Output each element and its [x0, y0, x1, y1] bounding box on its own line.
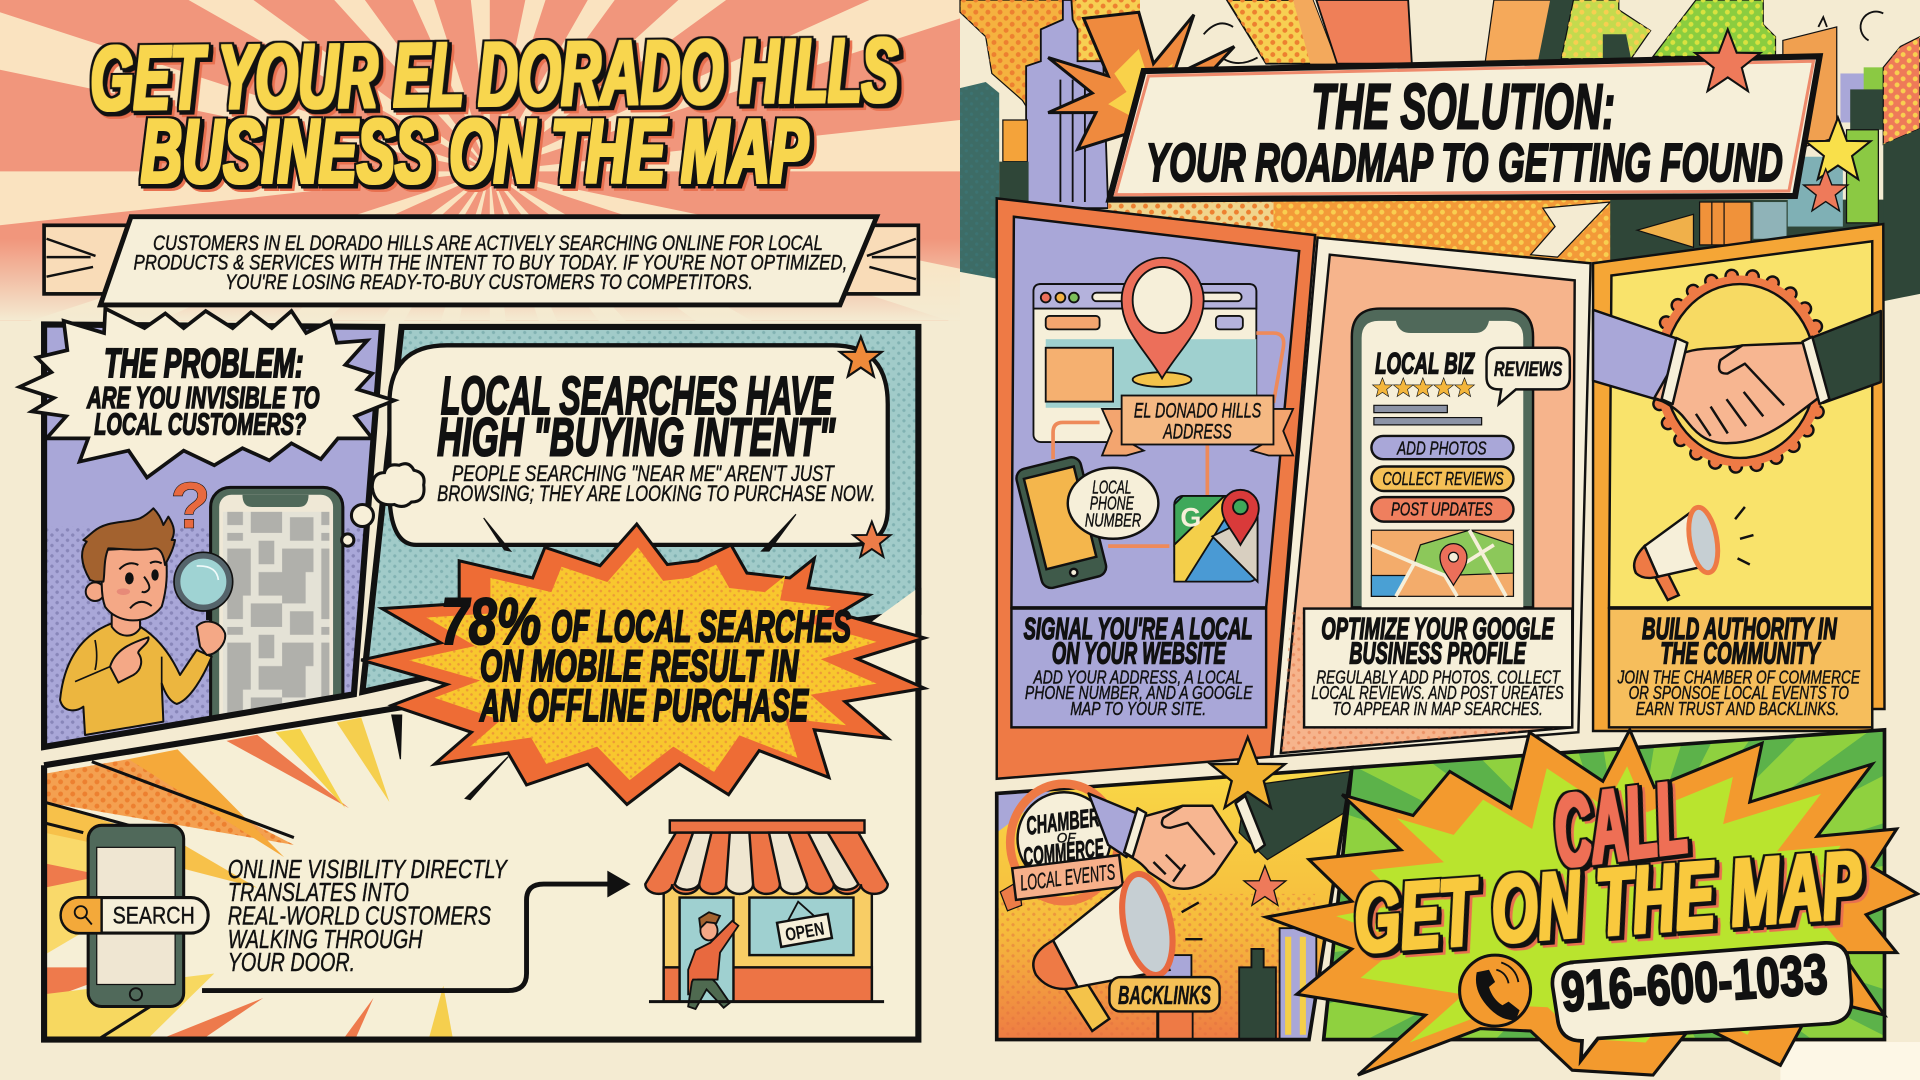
browser window	[1033, 284, 1284, 546]
icon: handshake small	[1089, 793, 1265, 889]
title: GET YOUR EL DORADO HILLS	[90, 20, 899, 129]
phone number bubble	[1552, 942, 1851, 1060]
open sign: OPEN	[784, 917, 826, 945]
icon: mobile phone	[1014, 455, 1108, 590]
caption: website: ON YOUR WEBSITE	[1052, 637, 1227, 671]
jagged bubble: the problem: LOCAL CUSTOMERS?	[94, 408, 306, 442]
open sign	[774, 897, 832, 947]
chamber badge: COMMERCE	[1022, 834, 1106, 872]
search bar: SEARCH	[113, 902, 195, 929]
caption: website	[1011, 609, 1266, 727]
bubble heading: HIGH "BUYING INTENT"	[437, 408, 836, 468]
address ribbon: EL DONADO HILLS	[1134, 400, 1261, 423]
body text: online visibility	[228, 856, 508, 977]
jagged bubble: the problem: ARE YOU INVISIBLE TO	[86, 381, 320, 415]
call text: CALL	[1548, 759, 1693, 890]
icon: gold star	[1211, 737, 1285, 808]
caption: google profile: REGULABLY ADD PHOTOS. COLLECT	[1316, 666, 1561, 687]
banner strip behind	[44, 225, 918, 294]
pill: collect reviews	[1371, 467, 1513, 491]
heading text	[1146, 72, 1783, 193]
magnifier	[206, 611, 210, 620]
burst text: OF LOCAL SEARCHES	[551, 603, 851, 652]
panel: community authority step	[1593, 224, 1884, 731]
phone number bubble: NUMBER	[1085, 510, 1141, 531]
teal tower	[960, 82, 999, 279]
awning	[645, 820, 888, 894]
orange stripe	[1485, 0, 1555, 61]
bubble text	[437, 461, 876, 506]
chamber badge: OF	[1057, 830, 1076, 845]
speech bubble: buying intent	[342, 337, 888, 546]
burst text: ON MOBILE RESULT IN	[480, 642, 799, 691]
icon: google map	[1174, 490, 1259, 582]
starburst	[1266, 730, 1918, 1075]
body text: online visibility: YOUR DOOR.	[228, 949, 355, 977]
body text: online visibility: WALKING THROUGH	[228, 926, 423, 954]
person in doorway	[688, 912, 738, 1009]
lavender tower	[1026, 0, 1108, 208]
body text: online visibility: ONLINE VISIBILITY DIRECTLY	[228, 856, 508, 884]
caption: google profile: OPTIMIZE YOUR GOOGLE	[1321, 612, 1555, 646]
man with magnifying glass	[60, 508, 233, 735]
icon: phone with search bar	[61, 825, 208, 1007]
face	[102, 547, 167, 620]
city buildings	[1157, 928, 1316, 1040]
mid band	[1273, 200, 1616, 263]
pill: add photos: ADD PHOTOS	[1396, 437, 1487, 458]
title	[90, 20, 899, 202]
icon: megaphone	[1634, 505, 1753, 600]
jagged bubble: the problem	[20, 309, 394, 478]
jagged bubble: the problem: THE PROBLEM:	[104, 340, 304, 386]
icon: five stars	[1373, 378, 1474, 396]
icon: handshake	[1593, 310, 1881, 443]
eyes and mouth	[126, 573, 133, 583]
listing name: LOCAL BIZ	[1375, 347, 1475, 380]
question mark: ?	[170, 469, 211, 543]
panel: website step	[997, 198, 1315, 779]
phone	[1352, 309, 1570, 607]
address ribbon: ADDRESS	[1162, 420, 1232, 443]
phone with blurred screen	[211, 487, 343, 744]
intro text: CUSTOMERS IN EL DORADO HILLS ARE ACTIVELY SEARCHING ONLINE FOR LOCAL	[153, 232, 823, 255]
icon: storefront	[645, 820, 888, 1009]
panel: problem	[44, 324, 382, 747]
phone number bubble: LOCAL	[1092, 476, 1131, 497]
body text: online visibility: TRANSLATES INTO	[228, 879, 409, 907]
panel: teal buying intent background	[362, 327, 918, 694]
skyline background right	[960, 0, 1920, 301]
heading text: THE SOLUTION:	[1311, 72, 1615, 143]
comic curves	[1204, 23, 1258, 63]
address ribbon	[1102, 396, 1293, 456]
hand holding magnifier	[197, 622, 225, 655]
caption: website: ADD YOUR ADDRESS, A LOCAL	[1033, 666, 1243, 687]
bubble heading: LOCAL SEARCHES HAVE	[441, 366, 834, 426]
bubble text: BROWSING; THEY ARE LOOKING TO PURCHASE NOW.	[437, 481, 876, 506]
phone number bubble: PHONE	[1090, 492, 1134, 513]
caption: website: SIGNAL YOU'RE A LOCAL	[1024, 612, 1253, 646]
seal badge	[1654, 276, 1826, 467]
caption: community	[1609, 609, 1872, 727]
sunburst header background	[0, 0, 960, 321]
phone number bubble	[1068, 468, 1158, 539]
intro text: PRODUCTS & SERVICES WITH THE INTENT TO BUY TODAY. IF YOU'RE NOT OPTIMIZED,	[133, 251, 847, 274]
burst text	[441, 585, 851, 731]
yellow green block	[1561, 0, 1651, 59]
neck	[112, 612, 140, 636]
sweater	[60, 623, 212, 735]
rays	[44, 718, 453, 1040]
pill: post updates	[1371, 497, 1513, 522]
backlinks pill: BACKLINKS	[1118, 982, 1211, 1010]
icon: google map: G	[1180, 503, 1201, 533]
ear	[86, 582, 104, 601]
caption: google profile: LOCAL REVIEWS. AND POST UREATES	[1311, 682, 1564, 703]
right buildings	[1783, 27, 1837, 153]
caption: website: PHONE NUMBER, AND A GOOGLE	[1025, 682, 1253, 703]
caption: google profile	[1304, 609, 1572, 727]
bubble heading	[437, 366, 836, 468]
sleeve	[1239, 771, 1352, 860]
title: BUSINESS ON THE MAP	[141, 101, 809, 202]
white patch lower right	[1780, 1042, 1920, 1080]
green block	[1653, 0, 1776, 56]
thought puffs	[342, 464, 424, 546]
chamber badge: CHAMBER	[1025, 804, 1101, 841]
icon: large megaphone	[1033, 864, 1202, 1031]
callout: 78 percent burst	[361, 514, 924, 804]
intro text: YOU'RE LOSING READY-TO-BUY CUSTOMERS TO COMPETITORS.	[225, 271, 753, 294]
arrow	[202, 871, 631, 991]
panel: lower search to store	[44, 588, 918, 1040]
pill: collect reviews: COLLECT REVIEWS	[1382, 468, 1504, 489]
panel: call to action	[1266, 730, 1920, 1080]
chamber badge	[1010, 784, 1118, 901]
hair	[82, 508, 175, 582]
icon: small star	[853, 522, 890, 557]
caption: community: EARN TRUST AND BACKLINKS.	[1636, 698, 1839, 719]
solution heading banner	[1109, 56, 1820, 200]
panel: chamber and backlinks	[997, 737, 1352, 1040]
mini map	[1371, 530, 1513, 596]
icon: banner stars	[1695, 29, 1871, 211]
icon: phone handset	[1460, 955, 1531, 1026]
orange dotted block	[960, 0, 1078, 110]
intro banner	[44, 217, 918, 305]
backlinks pill	[1109, 977, 1220, 1011]
pointing hand	[110, 637, 149, 683]
pill: post updates: POST UPDATES	[1391, 499, 1493, 520]
icon: salmon star	[1244, 866, 1286, 905]
caption: community: OR SPONSOE LOCAL EVENTS TO	[1629, 682, 1849, 703]
phone number bubble: 916-600-1033	[1559, 942, 1830, 1023]
burst text: 78%	[441, 585, 541, 659]
burst text: AN OFFLINE PURCHASE	[479, 680, 809, 731]
caption: website: MAP TO YOUR SITE.	[1070, 698, 1206, 719]
bubble text: PEOPLE SEARCHING "NEAR ME" AREN'T JUST	[452, 461, 835, 486]
caption: community: THE COMMUNITY	[1660, 637, 1821, 671]
reviews bubble	[1487, 348, 1570, 404]
icon: star	[840, 337, 882, 376]
intro text	[133, 232, 847, 294]
local events ribbon	[998, 855, 1124, 911]
icon: map pin	[1122, 258, 1204, 387]
reviews bubble: REVIEWS	[1494, 358, 1563, 381]
search bar	[61, 898, 208, 933]
salmon block	[1316, 0, 1412, 64]
connector lines	[1053, 333, 1284, 546]
local events ribbon: LOCAL EVENTS	[1019, 859, 1117, 896]
yellow dotted block	[1227, 0, 1337, 64]
icon: comic explosion	[1048, 12, 1234, 171]
panel: google business profile step	[1272, 238, 1591, 757]
caption: google profile: TO APPEAR IN MAP SEARCHES.	[1332, 698, 1543, 719]
body text: online visibility: REAL-WORLD CUSTOMERS	[228, 902, 491, 930]
caption: google profile: BUSINESS PROFILE	[1349, 637, 1527, 671]
